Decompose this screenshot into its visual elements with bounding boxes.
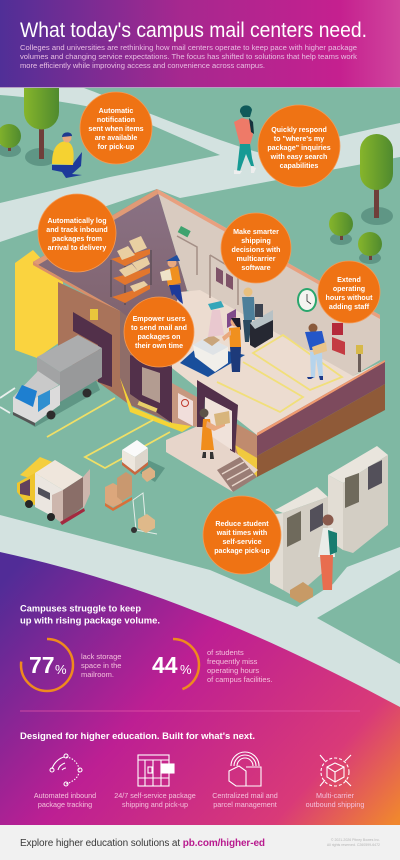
callout: where's my package: to "where's my <box>274 135 324 143</box>
icon captions <box>34 791 364 809</box>
left wall top edge <box>33 189 158 265</box>
callout: reduce wait times: package pick-up <box>214 547 270 555</box>
delivery truck at dock <box>12 335 102 427</box>
stat: 77 percent: % <box>55 662 67 677</box>
stat: 77 percent: mailroom. <box>81 670 114 679</box>
stairs <box>217 457 257 492</box>
stat: 44 percent: of campus facilities. <box>207 675 272 684</box>
callout: where's my package <box>258 105 340 187</box>
outer yellow wing <box>15 250 63 358</box>
callout: log and track: and track inbound <box>46 226 108 234</box>
exterior right lower wall <box>257 360 385 456</box>
tree: right tall <box>360 134 393 225</box>
white parking marks <box>0 388 15 413</box>
icon captions: shipping and pick-up <box>122 800 188 809</box>
callout: log and track: Automatically log <box>47 217 107 225</box>
intro text: more efficiently while improving access and convenience across campus. <box>20 63 265 70</box>
callout: notification: sent when items <box>88 125 144 133</box>
icon captions: 24/7 self-service package <box>114 791 196 800</box>
callout: reduce wait times: Reduce student <box>215 520 269 528</box>
stat: 44 percent: frequently miss <box>207 657 258 666</box>
callout: empower users: their own time <box>135 342 183 350</box>
callout: where's my package: package" inquiries <box>267 144 331 152</box>
icon captions: outbound shipping <box>306 800 364 809</box>
callout: extend hours <box>318 261 380 323</box>
callout: log and track <box>38 194 116 272</box>
dock door 2 <box>130 355 172 423</box>
solutions heading: Designed for higher education. Built for what's next. <box>20 731 255 741</box>
exterior left wall <box>58 282 130 405</box>
callout: smarter shipping: Make smarter <box>233 228 279 236</box>
lockers <box>270 446 388 597</box>
footer <box>0 825 400 860</box>
staff with parcel <box>305 324 327 380</box>
wall with no smoking sign <box>172 383 197 427</box>
stat: 77 percent: space in the <box>81 661 121 670</box>
delivery van <box>17 457 90 525</box>
callout: empower users <box>124 297 194 367</box>
icon: outbound shipping <box>320 755 351 786</box>
wall post <box>358 345 361 372</box>
lawn patch near kiosks <box>317 570 400 664</box>
intro text: volumes and changing service expectations. The focus has shifted to solutions that help teams work <box>20 54 358 61</box>
dock door 1 <box>73 312 112 387</box>
wall end <box>235 423 257 477</box>
yellow parking lines <box>47 398 170 468</box>
footer call to action: Explore higher education solutions at pb.com/higher-ed <box>20 838 265 849</box>
stat: 77 percent: lack storage <box>81 652 121 661</box>
callout: smarter shipping: software <box>241 264 271 272</box>
callout: extend hours: operating <box>333 285 365 293</box>
student walking on phone <box>234 105 256 174</box>
student at lockers <box>318 514 337 590</box>
callout: notification <box>80 92 152 164</box>
callout: where's my package: capabilities <box>280 162 318 170</box>
stat: 77 percent <box>21 639 121 691</box>
callout: extend hours: Extend <box>337 276 361 284</box>
stat: 44 percent <box>147 639 272 691</box>
callout: smarter shipping: shipping <box>241 237 271 245</box>
callout: where's my package: Quickly respond <box>271 126 327 134</box>
icon captions: Automated inbound <box>34 791 96 800</box>
exit sign <box>178 226 191 237</box>
callout: log and track: packages from <box>52 235 102 243</box>
yellow ground strip <box>120 378 193 432</box>
callout: where's my package: with easy search <box>270 153 327 161</box>
copyright: All rights reserved. C260599-6472 <box>327 843 380 847</box>
callout: smarter shipping <box>221 213 291 283</box>
bottom gradient panel <box>0 552 400 825</box>
callout: notification: notification <box>97 116 135 124</box>
stat: 77 percent: 77 <box>29 652 55 678</box>
wall panel <box>356 345 363 354</box>
floor parking-style lines <box>217 335 342 412</box>
left wall front rim <box>33 262 120 314</box>
left interior wall <box>33 189 187 360</box>
tree: left small <box>0 124 21 157</box>
mail center building <box>15 189 385 492</box>
intro text: Colleges and universities are rethinking how mail centers operate to keep pace with higher package <box>20 45 357 52</box>
callout: empower users: packages on <box>138 333 180 341</box>
customer at counter <box>222 318 241 372</box>
stats heading: up with rising package volume. <box>20 616 160 626</box>
stats heading: Campuses struggle to keep <box>20 604 141 614</box>
callout: extend hours: hours without <box>326 294 373 302</box>
stacked parcels <box>105 440 165 511</box>
header band <box>0 0 400 87</box>
right wall top edge <box>157 189 380 319</box>
right interior wall <box>157 189 380 376</box>
stat: 44 percent: 44 <box>152 652 178 678</box>
callout: notification: are available <box>95 134 137 142</box>
callout: log and track: arrival to delivery <box>48 244 106 252</box>
callout: empower users: to send mail and <box>131 324 187 332</box>
icon: lockers <box>138 755 174 786</box>
landing <box>166 425 258 492</box>
tree: top left <box>24 88 59 166</box>
wall clock <box>297 288 317 312</box>
stat: 44 percent: % <box>180 662 192 677</box>
woman at dock in orange <box>200 408 230 459</box>
scanner kiosk counter <box>180 301 245 377</box>
divider <box>20 710 360 712</box>
callout: smarter shipping: multicarrier <box>236 255 276 263</box>
icon captions: Multi-carrier <box>316 791 355 800</box>
callout: reduce wait times <box>203 496 281 574</box>
staff behind counter <box>242 288 273 348</box>
icon captions: Centralized mail and <box>212 791 278 800</box>
shelving with parcels <box>111 236 151 305</box>
fire safety equipment <box>332 323 345 355</box>
callout: extend hours: adding staff <box>329 303 370 311</box>
back doors <box>177 236 238 305</box>
copyright: © 2021-2026 Pitney Bowes Inc. <box>331 838 380 842</box>
stats heading <box>20 604 160 626</box>
stat: 44 percent: of students <box>207 648 244 657</box>
icon captions: parcel management <box>213 800 277 809</box>
icon: package tracking <box>50 754 82 786</box>
student sitting with phone <box>52 132 82 178</box>
door windows <box>216 267 233 290</box>
worker carrying boxes <box>160 255 183 304</box>
callout: empower users: Empower users <box>133 315 185 323</box>
dock number plate <box>90 309 98 320</box>
intro text <box>20 45 358 70</box>
callout: notification: Automatic <box>99 107 133 115</box>
campus walkways <box>0 88 400 725</box>
tree: right small 1 <box>329 212 353 245</box>
icon captions: package tracking <box>38 800 92 809</box>
callout: notification: for pick-up <box>98 143 135 151</box>
stat: 44 percent: operating hours <box>207 666 259 675</box>
floor <box>162 290 385 435</box>
callout: reduce wait times: wait times with <box>216 529 267 537</box>
callout: smarter shipping: decisions with <box>232 246 280 254</box>
header divider <box>0 87 400 88</box>
icon: parcel management <box>229 752 261 786</box>
callout: reduce wait times: self-service <box>222 538 262 546</box>
door 3 frame <box>197 380 238 453</box>
tree: right small 2 <box>358 232 382 264</box>
hand truck with parcels <box>131 493 157 534</box>
box near lockers <box>290 582 313 603</box>
copyright <box>327 838 380 847</box>
title: What today's campus mail centers need. <box>20 18 367 42</box>
